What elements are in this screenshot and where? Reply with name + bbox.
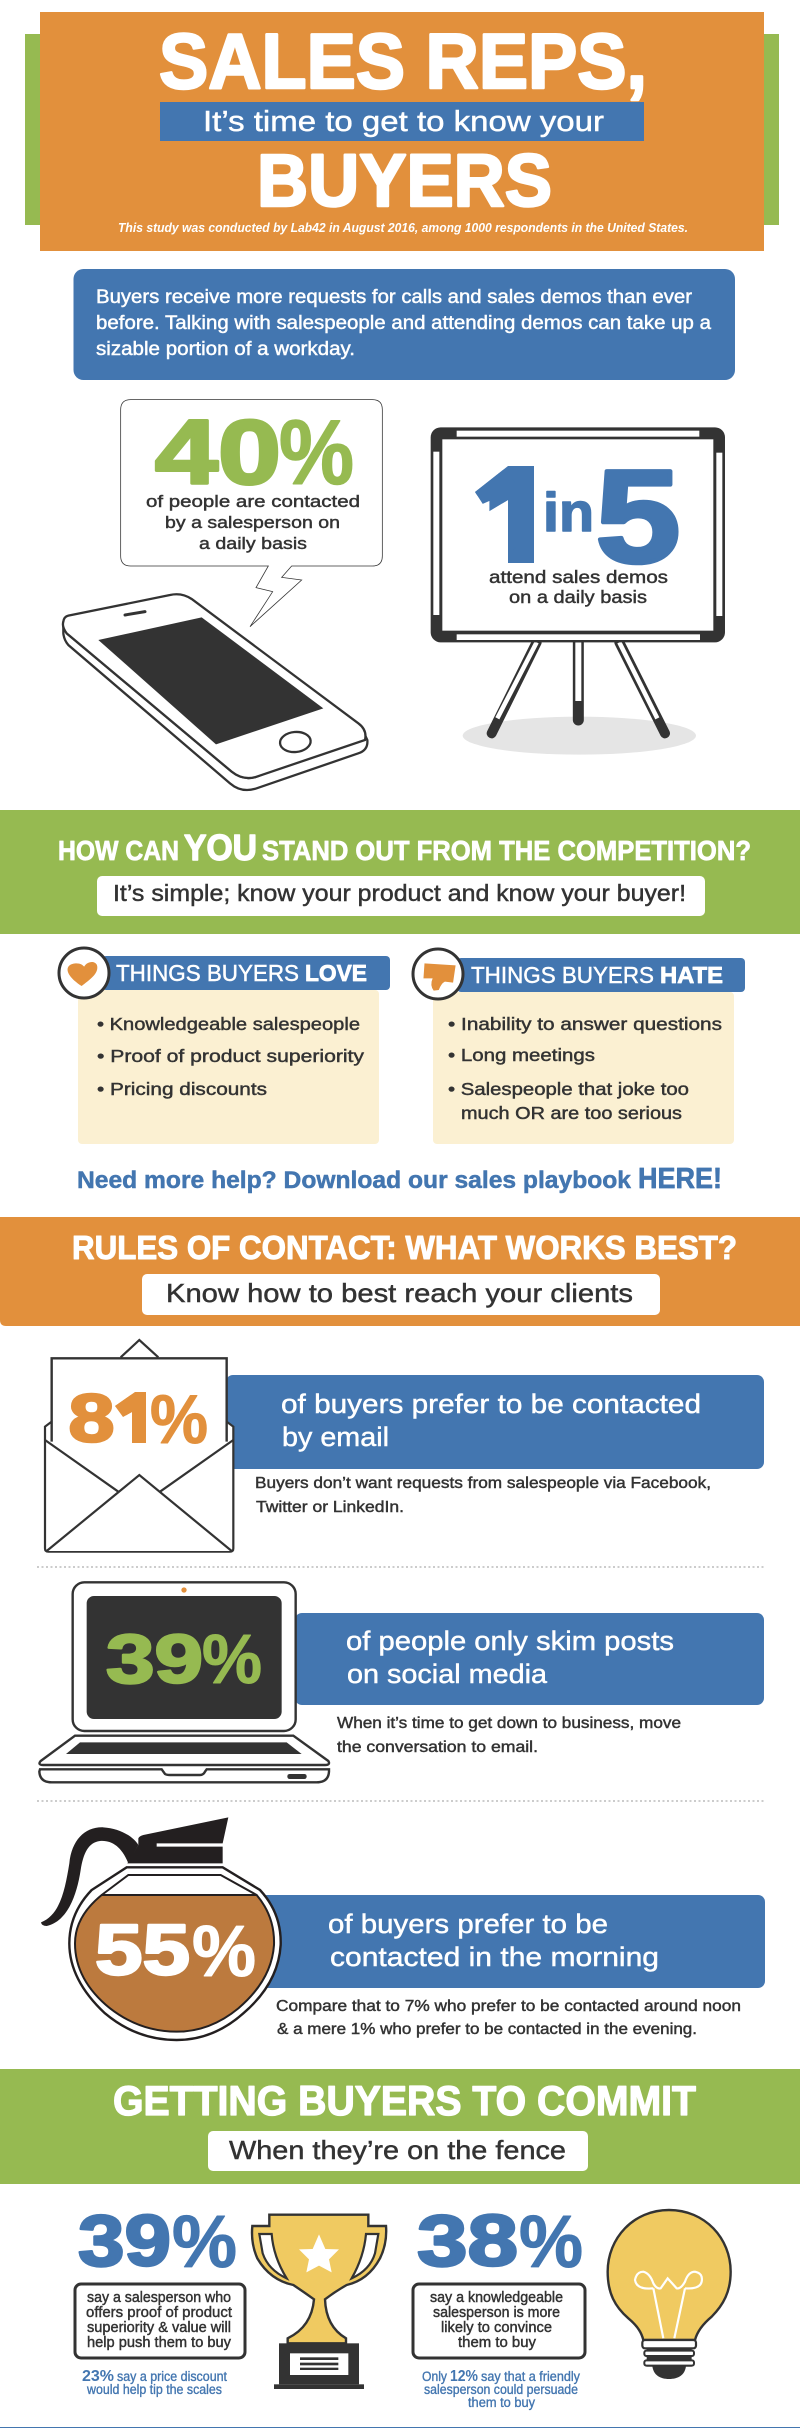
stat: 1 in 5: in — [543, 481, 594, 543]
stat: 39% — [106, 1620, 262, 1698]
heading text: STAND OUT FROM THE COMPETITION? — [262, 835, 751, 866]
stat: 1 in 5 — [475, 466, 679, 566]
heading text — [58, 827, 751, 868]
call to action: HERE! — [638, 1163, 722, 1195]
footnote: salesperson could persuade — [424, 2382, 578, 2397]
stat headline: on social media — [347, 1659, 548, 1689]
subheading box: Know how to best reach your clients — [166, 1278, 633, 1308]
stat block: morning — [41, 1817, 765, 2040]
subheading box: When they’re on the fence — [229, 2135, 566, 2165]
stat note: & a mere 1% who prefer to be contacted in the evening. — [277, 2021, 697, 2038]
title: sales reps: SALES REPS, — [159, 17, 647, 105]
callout box — [75, 2284, 245, 2358]
intro text panel: sizable portion of a workday. — [96, 339, 355, 360]
stat headline — [281, 1389, 701, 1452]
subtitle bar — [160, 102, 644, 141]
love list: • Pricing discounts — [97, 1079, 267, 1099]
stat headline: of buyers prefer to be — [328, 1909, 608, 1939]
stat: 40%: % — [279, 402, 354, 504]
footnote: say a price discount — [117, 2369, 227, 2384]
stat note: Compare that to 7% who prefer to be contacted around noon — [276, 1998, 741, 2015]
subheading box — [97, 876, 705, 916]
stat note: Buyers don’t want requests from salespeople via Facebook, — [255, 1475, 711, 1492]
stat note: Twitter or LinkedIn. — [256, 1499, 404, 1516]
callout box: help push them to buy — [87, 2334, 231, 2351]
stat block: social media — [39, 1582, 764, 1782]
icon: phone — [63, 594, 367, 790]
footnote — [82, 2368, 227, 2397]
icon: light bulb — [608, 2210, 731, 2379]
panel heading: THINGS BUYERS — [116, 960, 299, 986]
bubble caption: by a salesperson on — [165, 513, 340, 532]
title: buyers: BUYERS — [257, 139, 552, 222]
icon: coffee pot — [41, 1817, 281, 2040]
stat: 39%: 39 — [106, 1620, 203, 1698]
panel heading: HATE — [660, 962, 723, 988]
stat headline — [328, 1909, 659, 1972]
footnote: say that a friendly — [481, 2369, 580, 2384]
heading text: HOW CAN — [58, 835, 179, 866]
stat headline: of people only skim posts — [346, 1626, 674, 1656]
stat headline: contacted in the morning — [330, 1942, 659, 1972]
footnote: 12% — [450, 2368, 478, 2385]
speech bubble: 40% stat — [121, 400, 382, 627]
callout box: say a salesperson who — [87, 2289, 231, 2306]
footnote: would help tip the scales — [86, 2382, 222, 2397]
heading text: YOU — [184, 827, 257, 868]
stat note: the conversation to email. — [337, 1739, 538, 1756]
subtitle bar: It’s time to get to know your — [203, 106, 604, 138]
header banner — [25, 12, 779, 251]
stat block: email — [45, 1340, 764, 1552]
stat: 55%: % — [192, 1912, 256, 1992]
stat: 81%: 1 — [97, 1380, 166, 1456]
hate list: much OR are too serious — [461, 1103, 682, 1123]
icon: thumbs down — [413, 949, 463, 999]
stat: 40%: 40 — [155, 402, 281, 504]
callout box: them to buy — [458, 2334, 536, 2351]
call to action: Need more help? Download our sales playbook — [77, 1167, 632, 1194]
callout box — [413, 2284, 585, 2358]
stat: 39%: % — [202, 1620, 262, 1698]
green section heading: stand out — [0, 810, 800, 934]
orange section heading: rules of contact — [0, 1217, 800, 1326]
icon: presentation board — [431, 427, 725, 755]
hate list: • Inability to answer questions — [448, 1014, 722, 1034]
callout box: offers proof of product — [86, 2304, 233, 2321]
study note: This study was conducted by Lab42 in August 2016, among 1000 respondents in the United States. — [118, 221, 688, 235]
footnote: Only — [422, 2369, 447, 2384]
stat headline — [346, 1626, 674, 1689]
icon: envelope — [45, 1340, 233, 1552]
heading text: RULES OF CONTACT: WHAT WORKS BEST? — [72, 1229, 737, 1266]
green section heading: commit — [0, 2069, 800, 2184]
stat block: knowledge — [413, 2200, 585, 2410]
stat: 39% — [78, 2200, 237, 2283]
stat headline: of buyers prefer to be contacted — [281, 1389, 701, 1419]
footnote: them to buy — [468, 2395, 535, 2410]
intro text panel: before. Talking with salespeople and attending demos can take up a — [96, 313, 711, 334]
board caption — [489, 567, 668, 607]
callout box: say a knowledgeable — [430, 2289, 563, 2306]
panel: things buyers hate — [413, 949, 745, 1144]
callout box: superiority & value will — [87, 2319, 231, 2336]
board caption: on a daily basis — [509, 587, 647, 607]
hate list: • Salespeople that joke too — [448, 1079, 689, 1099]
icon: laptop — [39, 1582, 329, 1782]
footnote: 23% — [82, 2368, 114, 2385]
stat: 39%: % — [172, 2200, 237, 2283]
stat: 40% — [155, 402, 354, 504]
heading text: GETTING BUYERS TO COMMIT — [113, 2077, 696, 2124]
board caption: attend sales demos — [489, 567, 668, 587]
stat: 38% — [417, 2200, 583, 2283]
stat: 38%: % — [519, 2200, 583, 2283]
stat note — [337, 1715, 681, 1756]
love list: • Knowledgeable salespeople — [97, 1014, 360, 1034]
stat: 81%: % — [150, 1381, 208, 1458]
hate list: • Long meetings — [448, 1045, 595, 1065]
bubble caption: a daily basis — [199, 534, 307, 553]
subheading box: It’s simple; know your product and know your buyer! — [113, 880, 686, 906]
stat note — [276, 1998, 741, 2038]
callout box: likely to convince — [441, 2319, 552, 2336]
stat: 55%: 55 — [95, 1912, 190, 1990]
hate list — [448, 1014, 722, 1123]
bubble caption — [146, 492, 360, 553]
panel: things buyers love — [59, 948, 390, 1144]
stat: 38%: 38 — [417, 2202, 518, 2282]
stat: 81% — [70, 1392, 207, 1444]
stat: 81%: 8 — [68, 1380, 114, 1456]
subheading box — [208, 2131, 588, 2171]
stat: 55% — [95, 1912, 256, 1992]
panel heading: LOVE — [305, 960, 367, 986]
callout box: salesperson is more — [433, 2304, 560, 2321]
stat: 1 in 5: 5 — [596, 443, 680, 590]
stat: 1 in 5: 1 — [459, 441, 562, 587]
stat headline: by email — [282, 1422, 389, 1452]
footnote — [422, 2368, 580, 2410]
intro text panel: Buyers receive more requests for calls and sales demos than ever — [96, 287, 693, 308]
icon: heart — [59, 948, 109, 998]
stat block: proof — [75, 2200, 245, 2397]
love list: • Proof of product superiority — [97, 1046, 364, 1066]
stat note: When it’s time to get down to business, move — [337, 1715, 681, 1732]
icon: trophy — [252, 2215, 386, 2389]
stat: 39%: 39 — [78, 2202, 171, 2282]
love list — [97, 1014, 364, 1099]
panel heading: THINGS BUYERS — [471, 962, 654, 988]
intro text panel — [74, 269, 735, 380]
bubble caption: of people are contacted — [146, 492, 360, 511]
stat note — [255, 1475, 711, 1516]
subheading box — [142, 1274, 660, 1315]
